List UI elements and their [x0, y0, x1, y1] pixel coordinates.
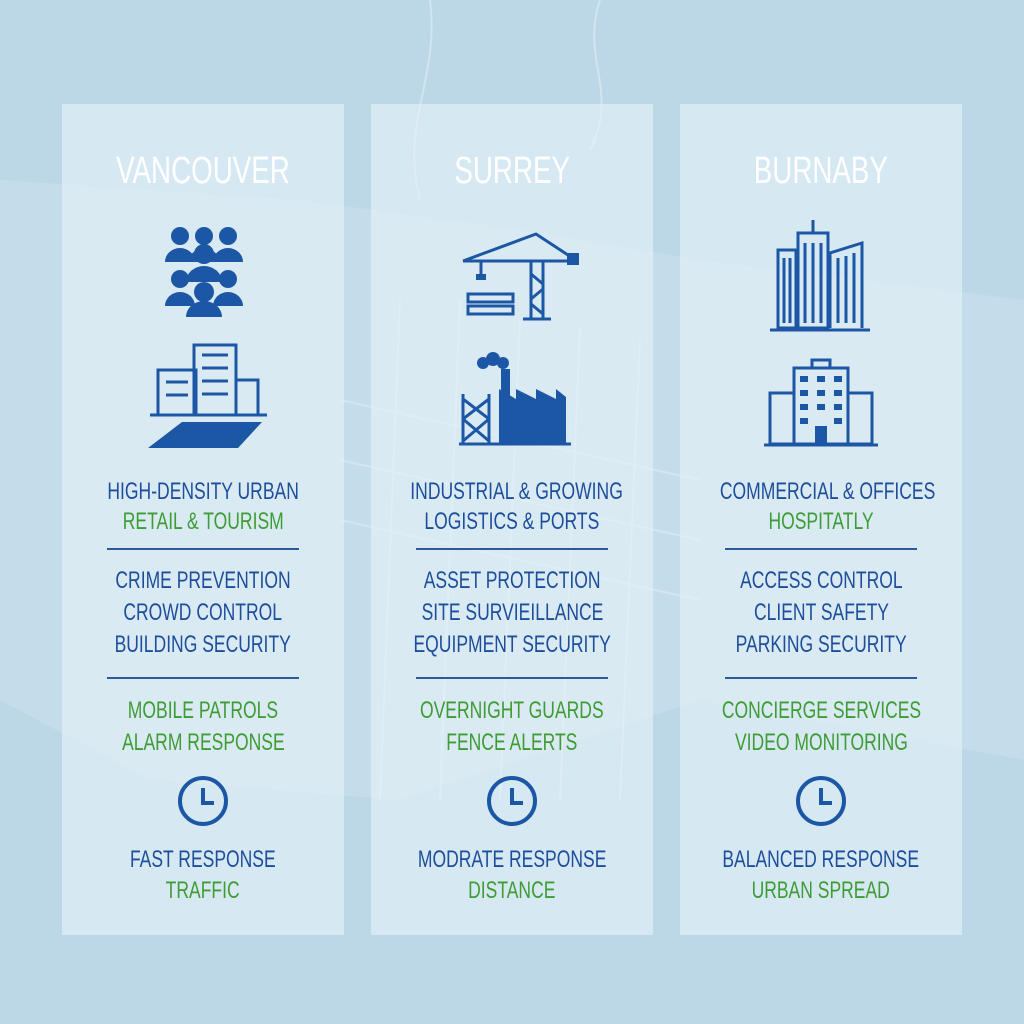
icon: factory — [459, 352, 571, 446]
panel: burnaby — [680, 104, 962, 935]
text: profile: COMMERCIAL & OFFICES — [720, 478, 935, 505]
panel: surrey: LOGISTICS & PORTS — [425, 508, 599, 535]
panel: surrey: SITE SURVIEILLANCE — [421, 599, 603, 626]
icon: clock — [796, 776, 846, 826]
icon: clock — [487, 776, 537, 826]
text: extras: MOBILE PATROLS — [128, 697, 278, 724]
text: profile: INDUSTRIAL & GROWING — [410, 478, 623, 505]
text: profile: HIGH-DENSITY URBAN — [107, 478, 299, 505]
text: response: MODRATE RESPONSE — [418, 846, 606, 873]
text: services: ACCESS CONTROL — [740, 567, 902, 594]
panel: vancouver: TRAFFIC — [166, 877, 240, 904]
title: surrey: SURREY — [454, 150, 570, 192]
icon: clock — [178, 776, 228, 826]
icon: crane — [462, 232, 579, 320]
icon: city buildings — [148, 344, 267, 448]
panel: surrey: EQUIPMENT SECURITY — [413, 631, 611, 658]
text: services: CRIME PREVENTION — [115, 567, 291, 594]
panel: vancouver: ALARM RESPONSE — [122, 729, 284, 756]
panel: vancouver: BUILDING SECURITY — [115, 631, 291, 658]
text: extras: OVERNIGHT GUARDS — [420, 697, 604, 724]
panel: burnaby: VIDEO MONITORING — [735, 729, 907, 756]
panel: burnaby: PARKING SECURITY — [735, 631, 906, 658]
panel: burnaby: CLIENT SAFETY — [753, 599, 889, 626]
icon: people — [165, 227, 243, 317]
text: extras: CONCIERGE SERVICES — [721, 697, 921, 724]
panel: burnaby: URBAN SPREAD — [752, 877, 890, 904]
title: burnaby: BURNABY — [754, 150, 888, 192]
text: services: ASSET PROTECTION — [424, 567, 600, 594]
panel: surrey — [371, 104, 653, 935]
panel: surrey: DISTANCE — [468, 877, 556, 904]
panel: vancouver: RETAIL & TOURISM — [123, 508, 283, 535]
panel: vancouver: CROWD CONTROL — [124, 599, 282, 626]
icon: skyscrapers — [770, 220, 870, 332]
panel: surrey: FENCE ALERTS — [446, 729, 578, 756]
panel: vancouver — [62, 104, 344, 935]
text: response: BALANCED RESPONSE — [723, 846, 919, 873]
panel: burnaby: HOSPITATLY — [768, 508, 874, 535]
text: response: FAST RESPONSE — [130, 846, 276, 873]
icon: office building — [764, 358, 878, 446]
title: vancouver: VANCOUVER — [116, 150, 290, 192]
